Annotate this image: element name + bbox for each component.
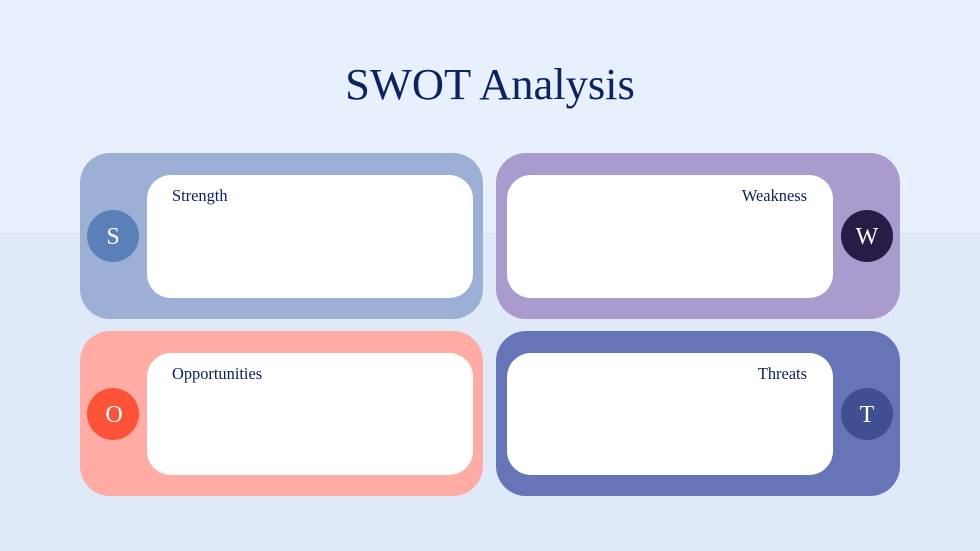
icon: W circle bbox=[841, 210, 893, 262]
icon: T circle: T bbox=[860, 402, 874, 428]
upper background band bbox=[0, 0, 980, 233]
panel: strength bbox=[80, 153, 483, 319]
text box: strength bbox=[147, 175, 473, 298]
title: SWOT Analysis bbox=[345, 59, 635, 109]
icon: S circle: S bbox=[106, 224, 120, 250]
heading: strength: Strength bbox=[172, 186, 228, 205]
heading: threats: Threats bbox=[758, 364, 807, 383]
heading: opportunities: Opportunities bbox=[172, 364, 262, 383]
panel: threats bbox=[496, 331, 900, 496]
text box: weakness bbox=[507, 175, 833, 298]
panel: opportunities bbox=[80, 331, 483, 496]
text box: opportunities bbox=[147, 353, 473, 475]
panel: weakness bbox=[496, 153, 900, 319]
icon: T circle bbox=[841, 388, 893, 440]
icon: S circle bbox=[87, 210, 139, 262]
icon: W circle: W bbox=[856, 224, 878, 250]
heading: weakness: Weakness bbox=[742, 186, 807, 205]
icon: O circle bbox=[87, 388, 139, 440]
icon: O circle: O bbox=[105, 402, 123, 428]
text box: threats bbox=[507, 353, 833, 475]
